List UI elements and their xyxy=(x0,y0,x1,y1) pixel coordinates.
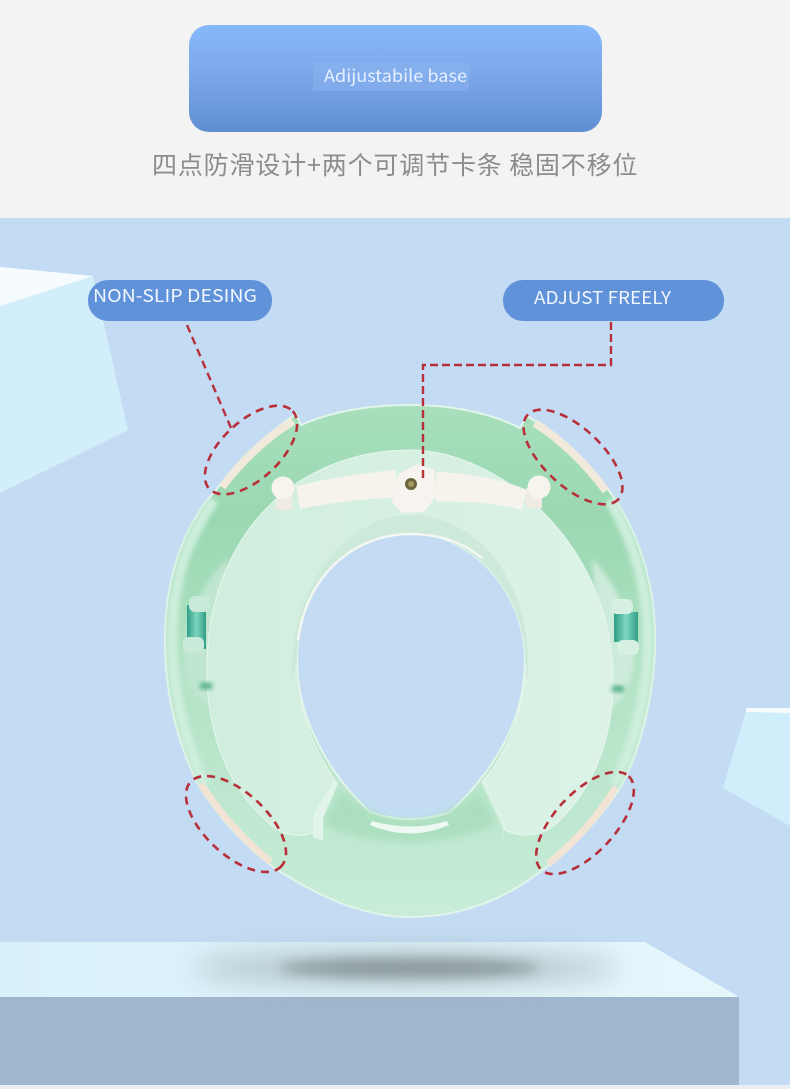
label pill: ADJUST FREELY: ADJUST FREELY xyxy=(534,284,671,310)
header button: Adjustable base xyxy=(189,25,602,132)
label pill: ADJUST FREELY xyxy=(503,280,724,321)
callout ellipse bottom left xyxy=(170,759,302,889)
adjusting strap xyxy=(296,470,396,509)
pale right edge xyxy=(610,500,648,785)
left peg xyxy=(272,476,294,510)
outer ring xyxy=(165,405,655,917)
seat shadow xyxy=(190,951,620,985)
label pill: NON-SLIP DESING: NON-SLIP DESING xyxy=(93,282,257,308)
rim white edge xyxy=(298,534,482,640)
callout ellipse top left xyxy=(190,390,312,510)
non-slip pad top left xyxy=(222,421,293,487)
non-slip pad bottom right xyxy=(548,787,616,864)
left clip recess xyxy=(184,558,228,712)
hub screw xyxy=(405,478,417,490)
adjusting strap right xyxy=(436,472,527,510)
centre hub xyxy=(392,464,437,513)
green shadows xyxy=(200,683,624,692)
right peg xyxy=(526,476,550,508)
platform xyxy=(0,942,790,1089)
header background xyxy=(0,0,790,218)
right clip recess xyxy=(592,558,634,712)
seat inner rim xyxy=(292,515,528,680)
ice cube left xyxy=(0,267,128,493)
subtitle: 四点防滑设计+两个可调节卡条 稳固不移位 xyxy=(152,146,638,182)
darker green below the hole xyxy=(322,790,496,842)
bottom slot xyxy=(370,821,449,834)
scene background xyxy=(0,218,790,1089)
callout ellipse bottom right xyxy=(519,756,651,890)
label pill: NON-SLIP DESING xyxy=(88,280,272,321)
non-slip pad top right xyxy=(535,423,606,491)
header button: Adjustable base: Adijustabile base xyxy=(324,62,467,87)
bottom left bracket xyxy=(313,779,338,840)
leader line: adjust xyxy=(423,322,611,480)
left side clip xyxy=(183,596,210,653)
pale left edge xyxy=(172,500,214,785)
callout ellipse top right xyxy=(508,394,638,520)
right side clip xyxy=(611,599,639,655)
potty seat xyxy=(165,405,655,917)
inner padded seat xyxy=(207,450,613,835)
bottom right bracket xyxy=(482,779,504,840)
leader line: non-slip xyxy=(187,325,231,428)
ice cube right xyxy=(723,708,790,826)
non-slip pad bottom left xyxy=(201,784,271,862)
